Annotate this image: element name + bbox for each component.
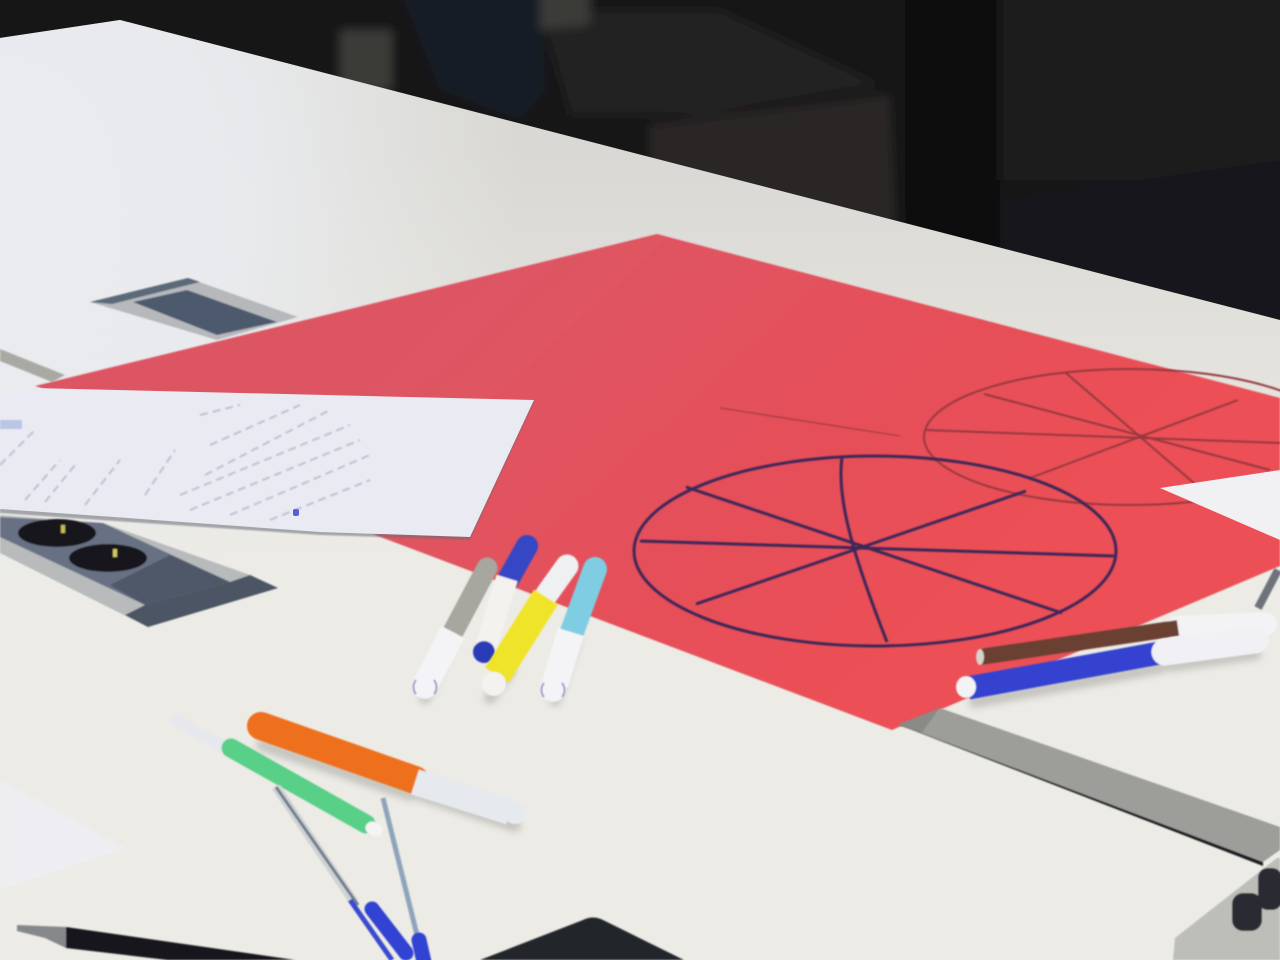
handwritten white paper	[0, 388, 534, 540]
cable grommet top	[90, 278, 298, 340]
marker: yellow	[482, 566, 567, 696]
black phone corner	[480, 918, 684, 960]
black pen	[17, 925, 295, 960]
marker: light blue	[540, 569, 595, 702]
ballpoint pen: long	[276, 787, 406, 960]
hand-drawn wheel: back	[720, 369, 1280, 505]
marker: blue	[473, 546, 527, 663]
marker: green	[176, 720, 376, 830]
dark room background	[0, 0, 1280, 340]
table seam left	[0, 349, 65, 382]
hand-drawn wheel: front	[634, 456, 1116, 646]
right table edge gray band	[897, 708, 1280, 866]
white paper corner right	[1160, 470, 1280, 540]
ballpoint pen: short	[383, 798, 424, 960]
marker: dark blue	[956, 640, 1255, 698]
marker: brown	[976, 624, 1265, 665]
power socket strip	[0, 515, 278, 627]
control device bottom right	[1173, 858, 1280, 960]
red poster sheet	[35, 234, 1280, 730]
marker: gray	[412, 568, 487, 699]
printed paper bottom left	[0, 780, 126, 890]
marker shadows	[262, 640, 1255, 826]
marker: orange	[261, 726, 526, 824]
marker tip at right edge	[1258, 570, 1278, 608]
